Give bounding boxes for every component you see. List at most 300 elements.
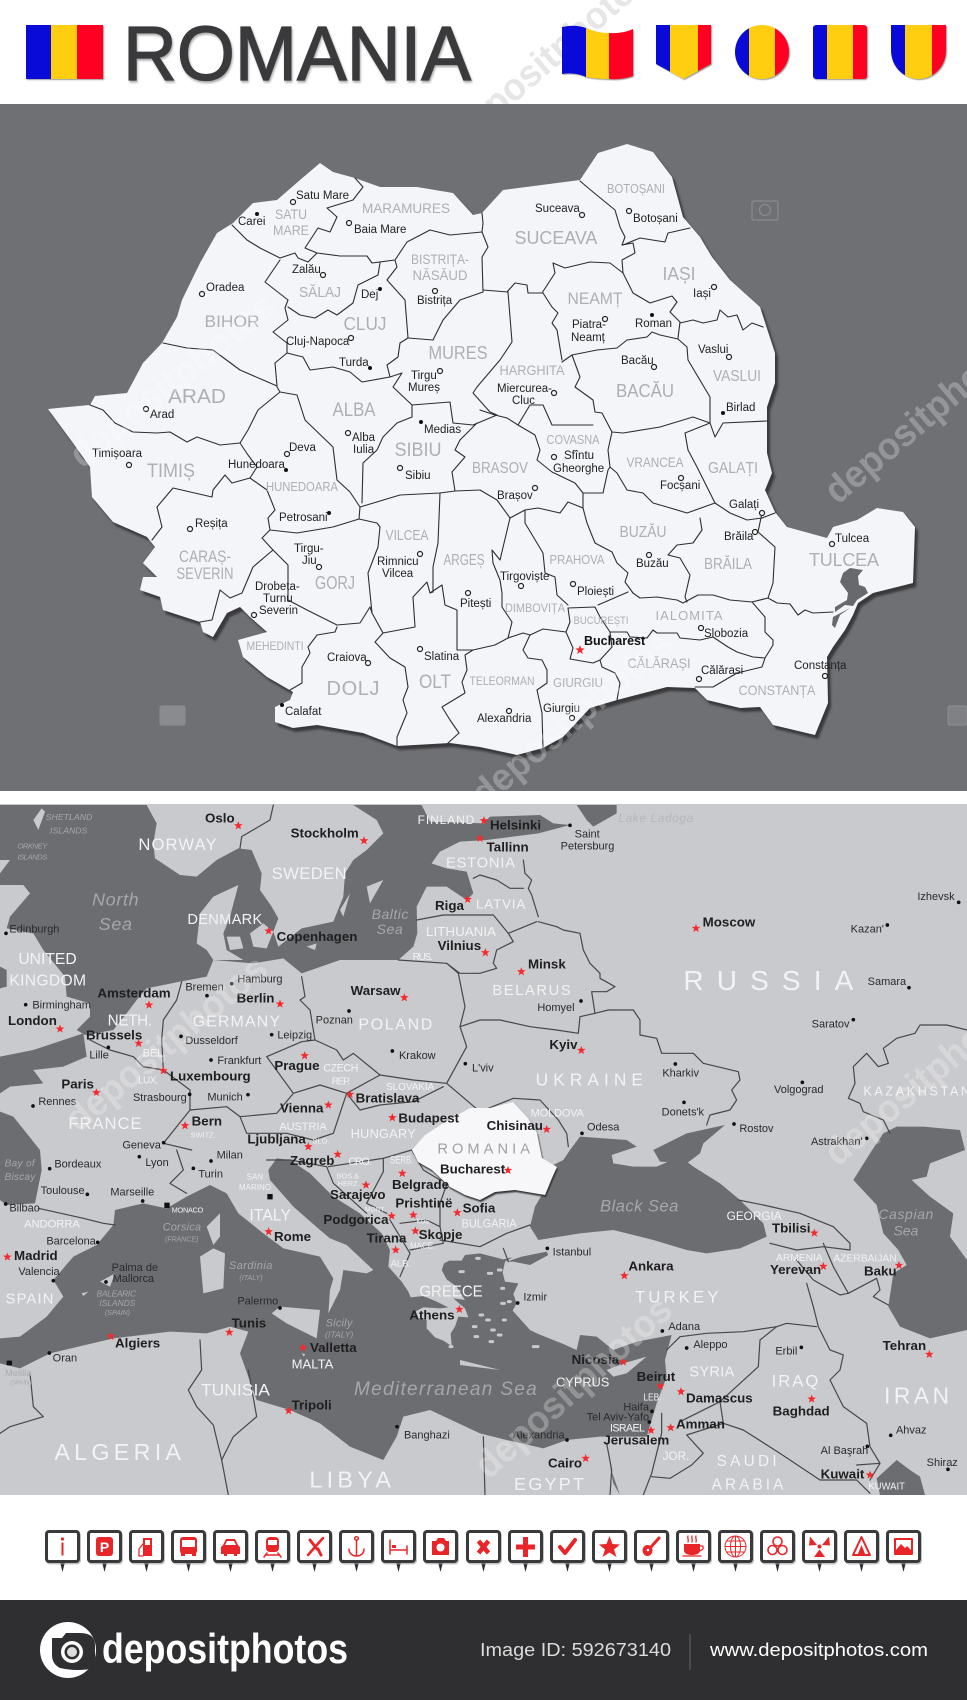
labels: northern Europe: GERMANY [193, 1014, 280, 1031]
labels: Russia and Ukraine: MOLDOVA [531, 1108, 585, 1120]
county names: HARGHITA [500, 362, 565, 378]
icon: cross mark [466, 1530, 502, 1572]
city names: Jiu [302, 555, 317, 567]
labels: northern Europe: Rennes [38, 1096, 77, 1108]
labels: northern Europe: FRANCE [68, 1114, 142, 1133]
labels: Middle East: IRAQ [772, 1372, 818, 1391]
labels: southern Europe and north Africa: Belgrade [392, 1177, 449, 1192]
labels: northern Europe: LITHUANIA [426, 924, 496, 939]
Romania highlighted [412, 1102, 557, 1200]
labels: southern Europe and north Africa: Turin [198, 1168, 223, 1180]
county names: TULCEA [809, 550, 879, 570]
labels: southern Europe and north Africa: KOS. [417, 1219, 431, 1225]
county names: VASLUI [713, 368, 761, 385]
county names: MARE [273, 222, 309, 238]
county boundaries [90, 178, 833, 748]
labels: northern Europe: Lille [89, 1049, 109, 1061]
city names: Timișoara [92, 448, 143, 460]
labels: northern Europe: Budapest [398, 1111, 460, 1126]
labels: southern Europe and north Africa: Sardinia [229, 1260, 272, 1272]
labels: southern Europe and north Africa: LIBYA [309, 1466, 391, 1492]
labels: Russia and Ukraine: Astrakhan' [811, 1136, 863, 1148]
county names: VRANCEA [626, 454, 684, 470]
flag: main [26, 25, 103, 79]
labels: Middle East: Cairo [548, 1456, 582, 1471]
labels: northern Europe: LUX. [138, 1075, 159, 1086]
labels: northern Europe: DENMARK [187, 912, 263, 928]
labels: southern Europe and north Africa: Sarajevo [330, 1187, 386, 1202]
camera marks [160, 201, 967, 725]
Romania outline [48, 144, 915, 755]
labels: Russia and Ukraine [487, 811, 967, 1148]
labels: southern Europe and north Africa: Marseille [110, 1187, 154, 1199]
labels: southern Europe and north Africa: Madrid [14, 1248, 58, 1263]
labels: southern Europe and north Africa: Athens [409, 1307, 455, 1322]
city names: Călărasi [701, 665, 743, 677]
icon: airplane [297, 1530, 333, 1572]
labels: northern Europe: SWEDEN [272, 864, 347, 883]
county names: OLT [419, 672, 451, 693]
labels: southern Europe and north Africa: BULGARIA [462, 1216, 517, 1230]
labels: northern Europe: Copenhagen [277, 929, 357, 944]
city names: Tulcea [835, 533, 870, 545]
watermarks on Romania panel: depositphotos [61, 285, 284, 476]
labels: Middle East: Kuwait [821, 1466, 865, 1481]
city names: Roman [635, 318, 672, 330]
labels: southern Europe and north Africa: MACE. [410, 1241, 435, 1250]
county names: BISTRIȚA- [411, 251, 469, 267]
labels: Russia and Ukraine: KAZAKHSTAN [863, 1085, 967, 1099]
labels: southern Europe and north Africa: Tripoli [292, 1397, 332, 1412]
city names: Tirgoviște [500, 571, 549, 583]
labels: southern Europe and north Africa: BOS.& [337, 1171, 359, 1180]
labels: Middle East: AZERBAIJAN [833, 1254, 897, 1265]
labels: northern Europe: Riga [435, 898, 464, 913]
labels: northern Europe: Brussels [86, 1027, 142, 1042]
labels: Russia and Ukraine: Chisinau [487, 1118, 543, 1133]
city names [92, 190, 870, 725]
city names: Birlad [726, 402, 755, 414]
city names: Alexandria [477, 713, 532, 725]
county names: BIHOR [204, 312, 260, 331]
labels: Middle East: Erbil [775, 1345, 797, 1357]
labels: Russia and Ukraine: Izhevsk [917, 891, 955, 903]
county names: CARAȘ- [179, 547, 231, 566]
labels: northern Europe: Krakow [399, 1050, 436, 1062]
city names: Miercurea- [497, 383, 552, 395]
county names: ARAD [168, 386, 226, 408]
county names: TIMIȘ [147, 461, 195, 482]
city names: Bistrița [417, 295, 453, 307]
labels: northern Europe: Ljubljana [247, 1131, 306, 1146]
county names: HUNEDOARA [266, 479, 338, 494]
labels: northern Europe: L'viv [472, 1063, 494, 1075]
city names: Satu Mare [296, 190, 349, 202]
labels: northern Europe: LATVIA [476, 896, 525, 911]
flag: shield [656, 25, 711, 79]
labels: northern Europe: Prague [274, 1058, 320, 1073]
labels: Middle East: GEORGIA [727, 1209, 782, 1223]
labels: northern Europe: Paris [61, 1077, 94, 1092]
flag: rounded shield [891, 25, 946, 79]
labels: southern Europe and north Africa: Corsica [163, 1222, 201, 1234]
labels: Russia and Ukraine: Volgograd [774, 1084, 823, 1096]
labels: northern Europe: SLOVAKIA [386, 1082, 435, 1093]
icon: fuel [129, 1530, 165, 1572]
county names: DIMBOVIȚA [505, 601, 565, 615]
labels: Middle East: Alexandria [513, 1429, 565, 1441]
city names: Deva [289, 442, 316, 454]
labels: Russia and Ukraine: Saint [575, 829, 600, 841]
labels: northern Europe: Leipzig [277, 1029, 312, 1041]
seas: north and east [0, 805, 617, 1093]
labels: northern Europe: REP. [332, 1076, 350, 1087]
icon: train [255, 1530, 291, 1572]
labels: northern Europe: FINLAND [418, 813, 475, 827]
labels: southern Europe and north Africa: ALGERIA [54, 1439, 181, 1465]
labels: southern Europe and north Africa: Rome [274, 1229, 311, 1244]
city names: Giurgiu [543, 703, 580, 715]
icon: anchor [339, 1530, 375, 1572]
labels: southern Europe and north Africa: Palermo [237, 1296, 278, 1308]
labels: northern Europe: Oslo [205, 810, 235, 825]
labels: southern Europe and north Africa [3, 1141, 537, 1492]
labels: northern Europe: Geneva [122, 1139, 162, 1151]
city names: Drobeta- [255, 581, 300, 593]
labels: northern Europe: Dusseldorf [185, 1035, 239, 1047]
labels: Russia and Ukraine: Saratov [812, 1019, 850, 1031]
labels: Middle East: Sea [893, 1223, 919, 1239]
labels: northern Europe: Edinburgh [9, 923, 59, 935]
labels: northern Europe: North [92, 890, 139, 910]
labels: southern Europe and north Africa: Milan [217, 1150, 243, 1162]
labels: Middle East: Jerusalem [603, 1433, 669, 1448]
city names: Vilcea [382, 568, 414, 580]
labels: Middle East: Caspian [878, 1206, 934, 1222]
labels: northern Europe: NORWAY [138, 835, 217, 854]
labels: Middle East: IRAN [884, 1382, 949, 1408]
flag: rounded rectangle [813, 25, 867, 79]
labels: northern Europe: UNITED [18, 951, 77, 968]
city names: Suceava [535, 203, 580, 215]
labels: northern Europe: AUSTRIA [279, 1121, 327, 1133]
labels: Middle East: Beirut [637, 1369, 676, 1384]
labels: southern Europe and north Africa: (ITALY) [325, 1329, 354, 1339]
labels: Middle East: Shiraz [927, 1457, 958, 1469]
city names: Dej [361, 289, 378, 301]
city names: Brăila [724, 531, 754, 543]
labels: Middle East: TURKEY [635, 1288, 718, 1307]
icon: radiation [802, 1530, 838, 1572]
labels: northern Europe: ISLANDS [50, 825, 88, 835]
labels: southern Europe and north Africa: MONACO [172, 1206, 204, 1215]
county names: GORJ [315, 573, 355, 593]
labels: northern Europe: Hamburg [237, 973, 283, 985]
city names: Botoșani [633, 213, 678, 225]
labels: southern Europe and north Africa: BALEARIC [97, 1289, 137, 1299]
labels: southern Europe and north Africa: (SPAIN) [105, 1310, 130, 1317]
county names: VILCEA [386, 527, 428, 544]
labels: northern Europe: SWITZ. [191, 1130, 216, 1139]
city names: Tirgu [411, 370, 437, 382]
labels: southern Europe and north Africa: Biscay [5, 1172, 36, 1183]
labels: northern Europe: ORKNEY [17, 841, 48, 850]
county names: MARAMURES [362, 200, 450, 216]
labels: Middle East: CYPRUS [556, 1376, 609, 1390]
labels: southern Europe and north Africa: Bordeaux [54, 1159, 102, 1171]
labels: Russia and Ukraine: Homyel [537, 1002, 575, 1014]
labels: Middle East: SAUDI [717, 1453, 777, 1470]
county names: PRAHOVA [550, 553, 605, 567]
labels: Middle East: Haifa [623, 1402, 650, 1414]
county names: TELEORMAN [470, 676, 534, 688]
labels: southern Europe and north Africa: GREECE [419, 1284, 483, 1301]
city names: Craiova [327, 652, 367, 664]
labels: northern Europe: BEL. [143, 1048, 166, 1060]
labels: Russia and Ukraine: BELARUS [492, 983, 571, 999]
county names: GIURGIU [553, 675, 603, 690]
labels: southern Europe and north Africa: Mediterranean Sea [354, 1379, 537, 1400]
city names: Rimnicu [377, 556, 419, 568]
labels: southern Europe and north Africa: Tirana [367, 1230, 407, 1245]
watermarks on Europe map: depositphotos [467, 1288, 681, 1487]
county names: SUCEAVA [514, 228, 598, 248]
seas: Mediterranean, Black, Caspian, Gulf [0, 1112, 967, 1495]
labels: southern Europe and north Africa: Lyon [145, 1157, 169, 1169]
labels: southern Europe and north Africa: TUNISIA [201, 1381, 271, 1400]
city names: Calafat [285, 706, 322, 718]
city names: Brașov [497, 490, 533, 502]
county names: SĂLAJ [299, 284, 341, 301]
labels: Middle East: Adana [668, 1321, 701, 1333]
labels: northern Europe: SHETLAND [46, 812, 92, 822]
city names: Oradea [206, 282, 245, 294]
city names: Medias [424, 424, 461, 436]
labels: northern Europe: Birmingham [32, 999, 91, 1011]
labels: Middle East: Aleppo [693, 1339, 728, 1351]
city names: Mureș [408, 382, 440, 394]
icon row [45, 1530, 922, 1572]
labels: Russia and Ukraine: Donets'k [662, 1106, 705, 1118]
county names: CĂLĂRAȘI [628, 655, 690, 671]
city names: Arad [150, 409, 174, 421]
county names: SEVERIN [176, 564, 234, 583]
city names: Cluj-Napoca [286, 336, 350, 348]
icon: bus [171, 1530, 207, 1572]
city names: Bucharest [584, 634, 646, 648]
labels: Russia and Ukraine: Kazan' [851, 924, 884, 936]
city names: Baia Mare [354, 224, 406, 236]
labels: Middle East: Black Sea [600, 1197, 678, 1216]
county names: DOLJ [326, 678, 380, 700]
labels: southern Europe and north Africa: CRO. [348, 1156, 372, 1168]
labels: southern Europe and north Africa: Bilbao [9, 1203, 40, 1215]
labels: northern Europe: Munich [207, 1092, 243, 1104]
labels: Russia and Ukraine: RUSSIA [683, 965, 854, 996]
city names: Gheorghe [553, 463, 604, 475]
city names: Petrosani [279, 512, 328, 524]
flag: waving [562, 26, 633, 79]
labels: southern Europe and north Africa: Prishtinë [395, 1196, 452, 1211]
labels: northern Europe: Frankfurt [217, 1055, 261, 1067]
labels: Middle East: EGYPT [514, 1474, 584, 1494]
labels: southern Europe and north Africa: Toulouse [41, 1185, 85, 1197]
labels: Russia and Ukraine: Odesa [587, 1122, 620, 1134]
labels: Middle East: ARMENIA [776, 1253, 823, 1264]
labels: northern Europe: Helsinki [490, 817, 541, 832]
country borders [90, 805, 967, 1150]
labels: northern Europe: SLO. [313, 1136, 329, 1145]
labels: northern Europe: Amsterdam [97, 986, 171, 1001]
city names: Constanța [794, 660, 847, 672]
labels: Russia and Ukraine: Minsk [528, 956, 566, 971]
labels: Russia and Ukraine: Lake Ladoga [618, 811, 694, 825]
logo mark [40, 1622, 96, 1678]
county names: GALAȚI [708, 460, 758, 477]
labels: northern Europe: Sea [377, 921, 403, 937]
labels: southern Europe and north Africa: Sofia [463, 1201, 496, 1216]
labels: southern Europe and north Africa: Podgorica [323, 1212, 389, 1227]
labels: northern Europe: Berlin [237, 991, 274, 1006]
labels: Russia and Ukraine: Rostov [739, 1123, 774, 1135]
labels: southern Europe and north Africa: (FRANCE) [165, 1237, 198, 1244]
icon: coffee [676, 1530, 712, 1572]
county names: CONSTANȚA [738, 682, 816, 698]
labels: northern Europe: Tallinn [487, 840, 529, 855]
city names: Buzău [636, 558, 669, 570]
county names: ARGEȘ [444, 552, 484, 569]
icon: plus [508, 1530, 544, 1572]
logo wordmark: depositphotos [102, 1625, 348, 1672]
labels: southern Europe and north Africa: Banghazi [404, 1429, 450, 1441]
county names: IALOMITA [656, 608, 723, 623]
labels: Russia and Ukraine: UKRAINE [536, 1070, 643, 1090]
labels: Middle East: Tel Aviv-Yafo [587, 1411, 649, 1423]
labels: Middle East: Ahvaz [896, 1424, 927, 1436]
county names: BUZĂU [620, 522, 666, 541]
city names: Galați [729, 499, 759, 511]
city names: Slobozia [704, 628, 749, 640]
labels: Russia and Ukraine: Kharkiv [662, 1068, 699, 1080]
labels: southern Europe and north Africa: SAN [247, 1172, 263, 1181]
labels: northern Europe: KINGDOM [9, 973, 86, 990]
city names: Alba [352, 432, 376, 444]
labels: northern Europe: Sea [99, 914, 132, 934]
labels: northern Europe: Bratislava [356, 1091, 420, 1106]
labels: southern Europe and north Africa: Palma de [112, 1262, 158, 1274]
divider [690, 1634, 691, 1670]
labels: northern Europe: Vienna [280, 1101, 324, 1116]
labels: southern Europe and north Africa: Bucharest [440, 1161, 506, 1176]
labels: Middle East: Al Başrah [821, 1445, 868, 1457]
county names: BACĂU [616, 381, 674, 401]
labels: southern Europe and north Africa: MONT. [365, 1207, 386, 1214]
labels: southern Europe and north Africa: (ITALY) [239, 1275, 263, 1282]
labels: southern Europe and north Africa: ALB. [391, 1259, 411, 1269]
labels: southern Europe and north Africa: Sicily [326, 1318, 354, 1330]
labels: southern Europe and north Africa: Valencia [18, 1266, 61, 1278]
labels: northern Europe: POLAND [358, 1016, 432, 1033]
county names: MEHEDINTI [246, 639, 304, 653]
labels: northern Europe: Vilnius [438, 938, 481, 953]
county names: CLUJ [344, 314, 386, 334]
labels: northern Europe: HUNGARY [351, 1127, 416, 1141]
county names: MURES [428, 343, 488, 363]
city names: Hunedoara [228, 459, 286, 471]
city names: Sibiu [405, 470, 431, 482]
labels: southern Europe and north Africa: Melilla [5, 1368, 32, 1378]
labels: southern Europe and north Africa: ROMANIA [437, 1141, 530, 1157]
city names: Sfîntu [564, 450, 594, 462]
labels: northern Europe: Bern [192, 1114, 222, 1129]
city names: Zalău [292, 264, 321, 276]
labels: Russia and Ukraine: Kyiv [549, 1037, 578, 1052]
icon: picture [886, 1530, 922, 1572]
city names: Carei [238, 216, 265, 228]
labels: Middle East: ARABIA [712, 1476, 784, 1493]
flag: oval [735, 25, 789, 79]
watermarks on Romania panel [61, 285, 967, 815]
county names: BUCUREȘTI [574, 615, 628, 627]
city names: Severin [259, 605, 298, 617]
labels: Middle East: LEB. [643, 1393, 662, 1404]
labels: Middle East: Baghdad [773, 1404, 830, 1419]
labels: Middle East: ISRAEL [610, 1423, 645, 1435]
icon: biohazard [760, 1530, 796, 1572]
icon: information [45, 1530, 81, 1572]
labels: southern Europe and north Africa: Bay of [5, 1159, 36, 1170]
city names: Slatina [424, 651, 460, 663]
county names: SATU [275, 206, 307, 222]
footer bar [0, 1600, 967, 1700]
icon: tent [844, 1530, 880, 1572]
city names: Turnu [263, 593, 293, 605]
county names: BOTOȘANI [607, 182, 665, 196]
labels: northern Europe [6, 810, 541, 1151]
labels: northern Europe: Stockholm [291, 825, 359, 840]
city markers [129, 202, 832, 718]
icon: bed [381, 1530, 417, 1572]
labels: Middle East: Nicosia [572, 1352, 620, 1367]
labels: northern Europe: Bremen [185, 982, 224, 994]
city names: Iași [693, 288, 711, 300]
labels: northern Europe: Poznan [316, 1014, 353, 1026]
labels: Middle East: Ankara [628, 1259, 674, 1274]
city names: Reșița [195, 518, 228, 530]
website: www.depositphotos.com [709, 1640, 928, 1660]
city names: Iulia [353, 444, 375, 456]
labels: southern Europe and north Africa: ITALY [249, 1206, 291, 1225]
country borders: south [0, 1150, 888, 1495]
labels: Middle East [513, 1197, 958, 1494]
labels: Russia and Ukraine: Moscow [703, 915, 756, 930]
city names: Piatra- [572, 319, 606, 331]
labels: southern Europe and north Africa: MARINO [239, 1183, 271, 1192]
labels: southern Europe and north Africa: ISLANDS [99, 1298, 136, 1308]
labels: Middle East: JOR. [663, 1449, 689, 1463]
county names: IAȘI [662, 264, 696, 284]
city names: Turda [339, 357, 369, 369]
panel: Romania map [0, 104, 967, 815]
labels: southern Europe and north Africa: Valletta [310, 1340, 357, 1355]
watermarks on Europe map: depositphotos [57, 947, 276, 1140]
labels: northern Europe: Baltic [372, 906, 408, 922]
labels: Middle East: Yerevan [770, 1262, 821, 1277]
labels: southern Europe and north Africa: Barcelona [46, 1236, 97, 1248]
labels: Middle East: Tbilisi [772, 1221, 811, 1236]
Danube delta lagoons [832, 568, 868, 628]
labels: Russia and Ukraine: Samara [868, 976, 907, 988]
